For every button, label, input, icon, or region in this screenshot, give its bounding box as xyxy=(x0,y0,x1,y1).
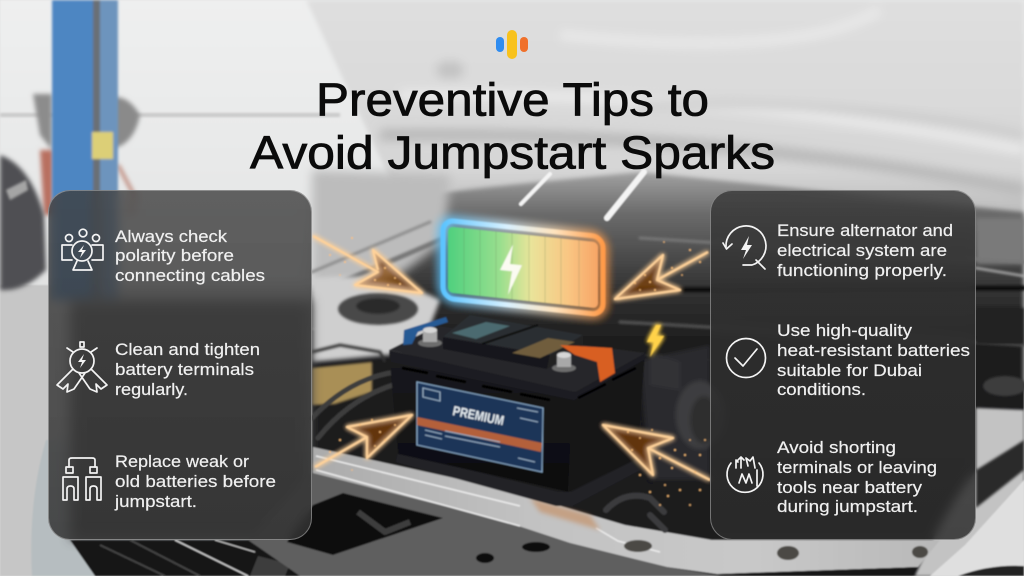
battery side face xyxy=(568,354,645,492)
haze left of indicator xyxy=(312,170,450,295)
tip: clean terminals xyxy=(57,340,260,399)
arrow bottom-left xyxy=(315,415,412,467)
fuse box xyxy=(312,345,385,405)
tip: quality batteries: suitable for Dubai xyxy=(777,361,922,380)
top front rim xyxy=(389,350,645,400)
hood support and bands xyxy=(312,222,1024,345)
garage floor xyxy=(0,285,330,576)
icon: polarity people xyxy=(62,229,103,270)
fender dark gap xyxy=(976,440,1024,508)
panel: right tips xyxy=(710,190,976,540)
tip: check polarity: polarity before xyxy=(115,246,234,265)
arrow top-left xyxy=(313,236,422,293)
slam panel opening xyxy=(287,493,443,555)
title: Avoid Jumpstart Sparks xyxy=(250,126,775,178)
right fender xyxy=(915,408,1024,576)
tip: avoid shorting: terminals or leaving xyxy=(777,458,937,477)
label orange band xyxy=(417,417,542,452)
tip text: Always check xyxy=(115,227,228,246)
left fender xyxy=(312,276,440,362)
gray slab xyxy=(248,470,720,576)
icon: jumper cable clamps xyxy=(63,458,101,500)
car window highlight xyxy=(6,180,28,200)
tip text: Use high-quality xyxy=(777,321,913,340)
orange clamp xyxy=(560,345,615,382)
tip: check polarity: connecting cables xyxy=(115,266,265,285)
engine bay xyxy=(312,330,1024,576)
shadow behind left panel xyxy=(70,300,312,540)
tip: replace batteries: jumpstart. xyxy=(114,492,197,511)
indicator glow xyxy=(443,220,603,315)
tip: avoid shorting: tools near battery xyxy=(777,478,923,497)
lip highlights xyxy=(316,456,660,552)
small sparks xyxy=(329,237,706,506)
hood lights xyxy=(521,172,644,218)
arrow bottom-right xyxy=(603,425,710,480)
cables xyxy=(312,372,396,438)
orange reflection on lip xyxy=(530,498,600,530)
right strut xyxy=(983,376,1024,396)
grille xyxy=(70,540,312,576)
lift column xyxy=(52,0,118,300)
title: Preventive Tips to xyxy=(316,74,709,126)
tip: quality batteries: conditions. xyxy=(777,380,866,399)
tip: replace batteries xyxy=(63,452,276,511)
underside of hood xyxy=(312,172,1024,390)
cell dividers xyxy=(464,228,579,306)
badge xyxy=(250,556,290,576)
lid front xyxy=(443,337,550,369)
left terminal xyxy=(418,327,442,347)
tip: check polarity xyxy=(62,227,265,285)
tip: check alternator: electrical system are xyxy=(777,241,947,260)
wall line xyxy=(0,113,340,117)
lower hoses xyxy=(606,496,665,530)
indicator bolt xyxy=(500,243,522,296)
headlight corner xyxy=(958,566,1024,576)
battery base flange xyxy=(396,452,640,506)
tip text: Avoid shorting xyxy=(777,438,896,457)
tip: replace batteries: old batteries before xyxy=(115,472,276,491)
grille bars xyxy=(100,540,255,576)
vents xyxy=(402,368,636,400)
label text: PREMIUM xyxy=(451,403,505,428)
fender highlight xyxy=(930,480,1024,576)
tip: check alternator xyxy=(723,221,953,280)
tip: avoid shorting xyxy=(727,438,937,516)
bolts xyxy=(624,540,928,560)
raised hood xyxy=(306,0,1024,225)
parked dark car xyxy=(0,155,46,290)
icon: search with bolt and refresh xyxy=(723,226,766,269)
tip: quality batteries: heat-resistant batteries xyxy=(777,341,970,360)
icon: battery terminals xyxy=(57,342,107,392)
panel: left tips xyxy=(48,190,312,540)
right terminal xyxy=(552,352,576,372)
indicator rim xyxy=(443,220,603,315)
tip: clean terminals: regularly. xyxy=(115,380,188,399)
title xyxy=(250,74,775,178)
small yellow bolt xyxy=(647,325,664,357)
indicator cells xyxy=(448,227,598,308)
tip: avoid shorting: during jumpstart. xyxy=(777,497,918,516)
car front body xyxy=(31,440,312,576)
icon: flames in circle xyxy=(727,457,763,492)
latch xyxy=(358,512,410,532)
holes xyxy=(476,542,550,563)
battery front face xyxy=(389,352,573,492)
lid reflections xyxy=(512,338,575,358)
strut tower xyxy=(338,293,418,325)
front lip xyxy=(313,447,940,574)
right engine parts xyxy=(640,345,724,480)
glowing battery indicator xyxy=(443,220,603,315)
tip text: Ensure alternator and xyxy=(777,221,953,240)
label small print xyxy=(423,388,538,462)
hood panel shading xyxy=(380,10,1024,190)
right hood underside bands xyxy=(976,218,1024,264)
tip text: Clean and tighten xyxy=(115,340,260,359)
icon: check circle xyxy=(726,338,766,378)
lid back xyxy=(443,315,583,355)
blue clamp xyxy=(403,317,448,345)
logo xyxy=(496,30,528,59)
battery label xyxy=(417,382,543,472)
under lip shadow xyxy=(720,567,918,576)
right grille xyxy=(976,308,1024,344)
lift equipment xyxy=(33,94,140,215)
battery top xyxy=(389,326,645,392)
tip text: Replace weak or xyxy=(115,452,249,471)
spark arrows xyxy=(313,236,710,480)
battery xyxy=(389,315,645,506)
arrow top-right xyxy=(615,252,708,299)
tip: check alternator: functioning properly. xyxy=(777,261,947,280)
lid right side xyxy=(547,335,583,369)
lid seam xyxy=(482,325,538,344)
tip: quality batteries xyxy=(726,321,970,399)
tip: clean terminals: battery terminals xyxy=(115,360,254,379)
